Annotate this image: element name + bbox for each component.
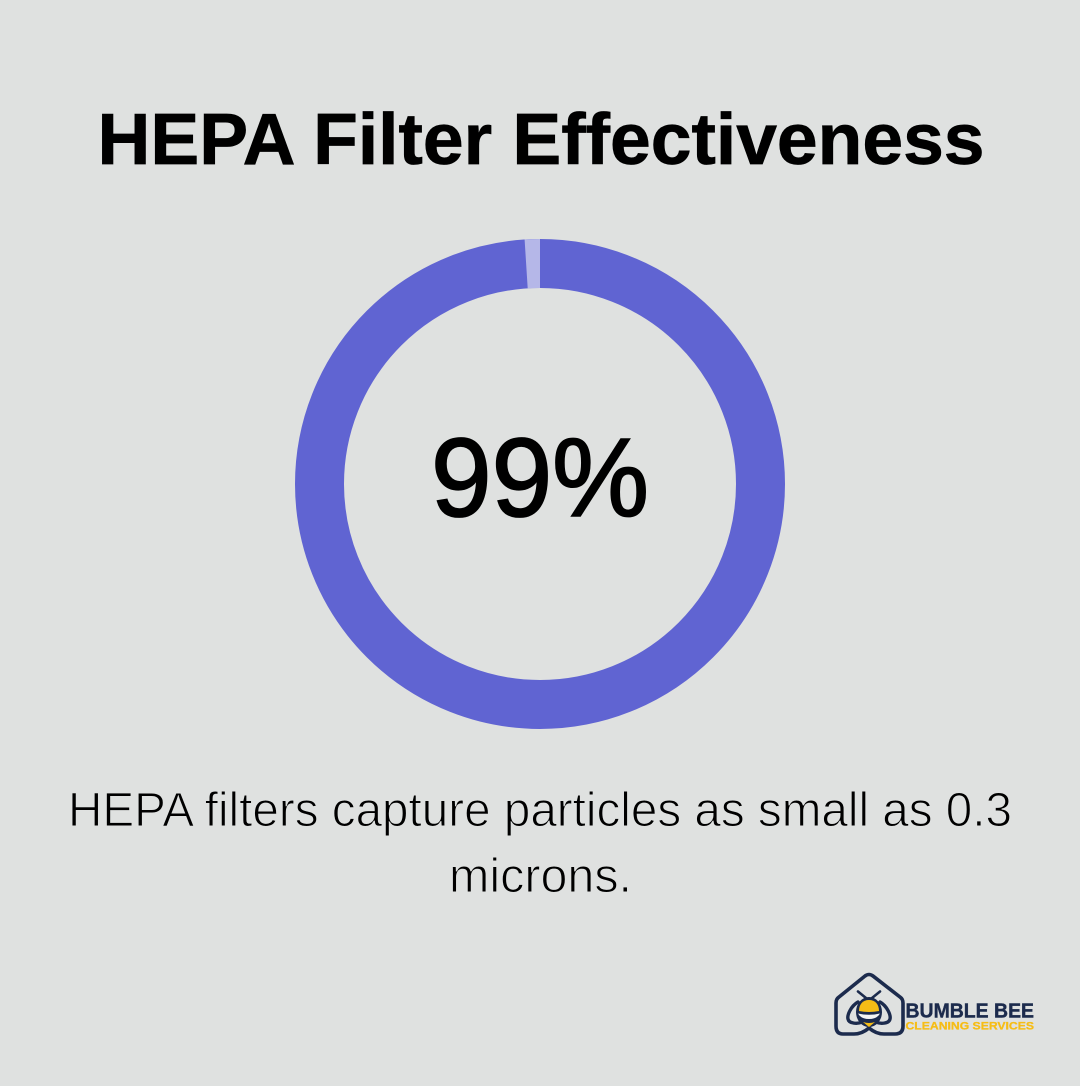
title: HEPA Filter Effectiveness — [98, 100, 984, 180]
icon: house with bee — [836, 974, 903, 1034]
description text: HEPA filters capture particles as small as 0.3 — [68, 783, 1012, 837]
donut chart: 99 percent — [320, 239, 760, 704]
description text: microns. — [449, 849, 632, 903]
logo tagline: CLEANING SERVICES — [906, 1020, 1035, 1032]
logo name: BUMBLE BEE — [906, 1000, 1034, 1022]
center value: 99% — [431, 416, 649, 540]
description text — [68, 783, 1012, 903]
logo: Bumble Bee Cleaning Services — [836, 974, 1035, 1034]
